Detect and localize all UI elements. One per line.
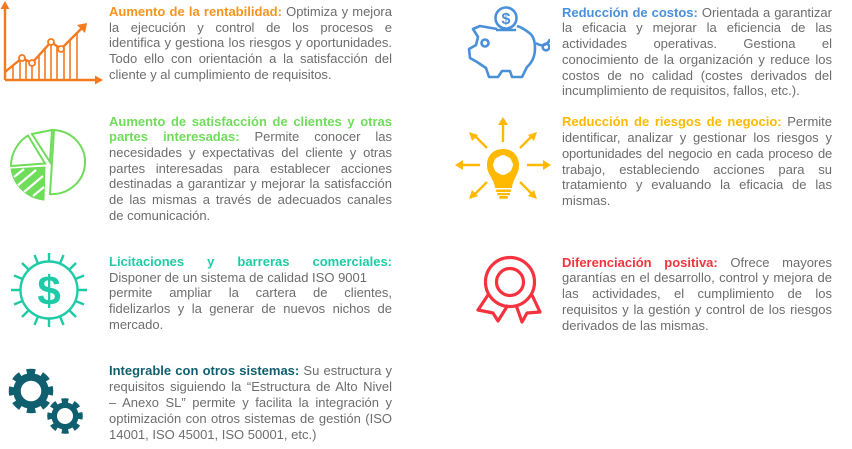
text block: Reducción de costos: costos de no calidad (costes derivados del bbox=[562, 68, 832, 83]
text block: Diferenciación positiva: las actividades, el cumplimiento de los bbox=[562, 286, 832, 301]
text block: Integrable con otros sistemas: – Anexo SL” permite y facilita la integración y bbox=[109, 395, 392, 410]
text block: Aumento de la rentabilidad: cliente y al cumplimiento de requisitos. bbox=[109, 67, 332, 82]
text block: Aumento de la rentabilidad bbox=[109, 4, 392, 82]
text block: Aumento de satisfacción bbox=[109, 114, 392, 223]
text block: Integrable con otros sistemas: requisitos siguiendo la “Estructura de Alto Nivel bbox=[109, 379, 392, 394]
text block: Reducción de riesgos de negocio: identificar, analizar y gestionar los riesgos y bbox=[562, 130, 832, 145]
icon: piggy bank: $ bbox=[502, 11, 511, 28]
text block: Aumento de satisfacción: de las mismas a través de adecuados canales bbox=[109, 192, 392, 207]
text block: Diferenciación positiva: derivados de las mismas. bbox=[562, 318, 709, 333]
text block: Aumento de satisfacción: destinadas a garantizar y mejorar la satisfacción bbox=[109, 176, 392, 191]
icon: line chart bbox=[0, 1, 103, 84]
text block: Aumento de la rentabilidad: Todo ello con orientación a la satisfacción del bbox=[109, 51, 392, 66]
text block: Integrable con otros sistemas: 14001, ISO 45001, ISO 50001, etc.) bbox=[109, 427, 316, 442]
text block: Reducción de riesgos de negocio: oportunidades del negocio en cada proceso de bbox=[562, 146, 832, 161]
icon: gears bbox=[8, 368, 83, 434]
text block: Licitaciones y barreras comerciales: Licitaciones y barreras comerciales: bbox=[109, 254, 392, 269]
text block: Integrable con otros sistemas bbox=[109, 363, 392, 442]
text block: Reducción de costos: incumplimiento de requisitos, fallos, etc.). bbox=[562, 83, 800, 98]
text block: Reducción de costos: la eficacia y mejorar la eficiencia de las bbox=[562, 20, 832, 35]
text block: Reducción de riesgos de negocio bbox=[562, 114, 832, 208]
text block: Aumento de la rentabilidad: la ejecución y control de los procesos e bbox=[109, 20, 392, 35]
icon: piggy bank bbox=[468, 6, 550, 78]
text block: Diferenciación positiva: Diferenciación positiva: Ofrece mayores bbox=[562, 255, 832, 270]
text block: Aumento de satisfacción: partes interesadas: Permite conocer las bbox=[109, 129, 392, 144]
text block: Reducción de costos: conocimiento de la organización y reduce los bbox=[562, 52, 832, 67]
text block: Aumento de satisfacción: necesidades y expectativas del cliente y otras bbox=[109, 145, 392, 160]
icon: light bulb with arrows bbox=[455, 117, 551, 199]
text block: Aumento de satisfacción: de comunicación. bbox=[109, 208, 210, 223]
text block: Licitaciones y barreras comerciales: permite ampliar la cartera de clientes, bbox=[109, 285, 392, 300]
text block: Aumento de la rentabilidad: Aumento de la rentabilidad: Optimiza y mejora bbox=[109, 4, 392, 19]
text block: Integrable con otros sistemas: Integrable con otros sistemas: Su estructura y bbox=[109, 363, 392, 378]
text block: Integrable con otros sistemas: optimización con otros sistemas de gestión (ISO bbox=[109, 411, 392, 426]
icon: dollar sun: $ bbox=[37, 267, 61, 314]
text block: Reducción de costos: actividades operativas. Gestiona el bbox=[562, 36, 832, 51]
icon: award rosette bbox=[476, 256, 542, 324]
text block: Licitaciones y barreras comerciales bbox=[109, 254, 392, 332]
text block: Diferenciación positiva: requisitos y la gestión y control de los riesgos bbox=[562, 302, 832, 317]
text block: Diferenciación positiva bbox=[562, 255, 832, 333]
text block: Licitaciones y barreras comerciales: mercado. bbox=[109, 317, 163, 332]
text block: Aumento de satisfacción: Aumento de satisfacción de clientes y otras bbox=[109, 114, 392, 129]
text block: Licitaciones y barreras comerciales: fidelizarlos y la generar de nuevos nichos de bbox=[109, 301, 392, 316]
text block: Reducción de riesgos de negocio: Reducción de riesgos de negocio: Permite bbox=[562, 114, 832, 129]
icon: dollar sun bbox=[11, 253, 87, 327]
text block: Diferenciación positiva: garantías en el desarrollo, control y mejora de bbox=[562, 270, 832, 285]
text block: Reducción de riesgos de negocio: tratamiento y evaluando la eficacia de las bbox=[562, 177, 832, 192]
text block: Reducción de costos: Reducción de costos: Orientada a garantizar bbox=[562, 5, 832, 20]
text block: Reducción de riesgos de negocio: trabajo, estableciendo acciones para su bbox=[562, 162, 832, 177]
text block: Reducción de riesgos de negocio: mismas. bbox=[562, 193, 610, 208]
text block: Aumento de satisfacción: partes interesadas para establecer acciones bbox=[109, 161, 392, 176]
text block: Licitaciones y barreras comerciales: Disponer de un sistema de calidad ISO 9001 bbox=[109, 270, 367, 285]
text block: Aumento de la rentabilidad: identifica y gestiona los riesgos y oportunidades. bbox=[109, 35, 392, 50]
text block: Reducción de costos bbox=[562, 5, 832, 98]
icon: pie chart bbox=[10, 128, 86, 200]
